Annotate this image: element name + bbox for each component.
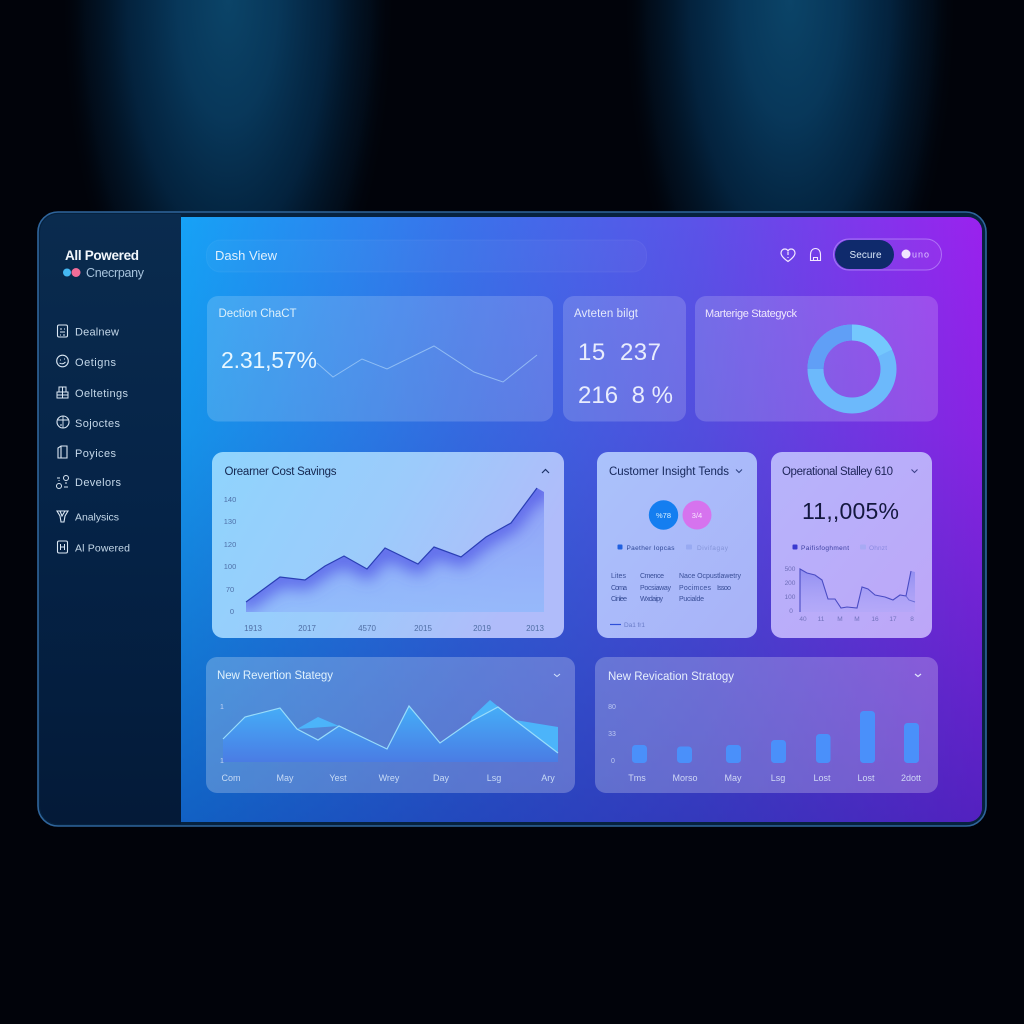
mini legend: [610, 622, 645, 629]
donut chart: [816, 332, 888, 406]
x axis labels: Morso: [672, 773, 698, 783]
brand name: All Powered: [65, 248, 139, 263]
legend: Ohnzt: [869, 545, 887, 552]
data table: Coma: [611, 585, 627, 592]
header search bar: [206, 240, 646, 272]
x axis labels: M: [854, 616, 860, 623]
nav item: Dealnew: Dealnew: [75, 326, 119, 338]
y axis labels: 100: [224, 562, 236, 571]
metric row 2: 216 8 %: [578, 382, 673, 409]
bubble: blue: %78: [656, 511, 671, 520]
nav item: Oeltetings: Oeltetings: [75, 388, 128, 400]
y axis labels: 80: [608, 704, 616, 711]
heading: New Revertion Stategy: [217, 670, 333, 682]
data table: [611, 573, 742, 603]
nav item: Poyices: Poyices: [75, 448, 116, 460]
heading: Marterige Stategyck: [705, 308, 798, 320]
heading: Avteten bilgt: [574, 308, 639, 320]
heading: Dection ChaCT: [218, 308, 296, 320]
nav item: Oetigns: Oetigns: [75, 357, 116, 369]
panel: new revention strategy: [206, 657, 575, 793]
legend: [618, 544, 729, 552]
bubble: pink: 3/4: [692, 511, 702, 520]
x axis labels: Tms: [628, 773, 646, 783]
legend: Paether Iopcas: [626, 545, 675, 552]
data table: Pucialde: [679, 596, 704, 603]
nav item: Develors: [56, 476, 122, 489]
nav item: Poyices: [58, 446, 116, 460]
x axis labels: Lost: [857, 773, 875, 783]
nav item: Analysics: Analysics: [75, 512, 119, 524]
panel: new revication strategy: [595, 657, 938, 793]
x axis labels: 2015: [414, 624, 432, 633]
panel: operational strategy: [771, 452, 932, 638]
nav item: Dealnew: [58, 325, 119, 338]
data table: Nace Ocpustlawetry: [679, 573, 742, 580]
panel: key figures: [563, 296, 686, 422]
chevron: [736, 470, 742, 472]
x axis labels: 4570: [358, 624, 376, 633]
dashboard frame: [38, 212, 986, 826]
panel: customer insight trends: [597, 452, 757, 638]
y axis labels: 130: [224, 517, 236, 526]
x axis labels: 17: [889, 616, 897, 623]
y axis labels: [608, 704, 616, 765]
toggle: secure: Secure: [850, 250, 882, 261]
panel: marketing strategy donut: [695, 296, 938, 422]
data table: Cmence: [640, 573, 664, 580]
metric row 1: 15 237: [578, 339, 661, 366]
y axis labels: 120: [224, 540, 236, 549]
x axis labels: [221, 773, 555, 783]
heading: Operational Stalley 610: [782, 466, 893, 478]
nav item: Oeltetings: [57, 387, 128, 400]
x axis labels: Yest: [329, 773, 347, 783]
y axis labels: [220, 704, 224, 765]
heading: Orearner Cost Savings: [224, 466, 337, 478]
x axis labels: 2019: [473, 624, 491, 633]
legend: Paifisfoghment: [801, 545, 849, 552]
sidebar: [40, 214, 181, 824]
y axis labels: 100: [785, 594, 796, 601]
x axis labels: 11: [818, 616, 825, 623]
x axis labels: Day: [433, 773, 449, 783]
data table: Wxdaipy: [640, 596, 664, 603]
y axis labels: 0: [230, 607, 234, 616]
toggle: secure: [834, 239, 942, 270]
data table: Pocsiaway: [640, 585, 672, 592]
heading: New Revication Stratogy: [608, 671, 734, 683]
y axis labels: 500: [785, 566, 796, 573]
x axis labels: 16: [871, 616, 879, 623]
panel: decision chart: [207, 296, 553, 422]
x axis labels: 2013: [526, 624, 544, 633]
y axis labels: 1: [220, 704, 224, 711]
y axis labels: 33: [608, 731, 616, 738]
chevron: [915, 674, 921, 676]
chevron: [542, 470, 549, 473]
header search bar: Dash View: [215, 248, 278, 263]
toggle: secure: uno: [912, 250, 929, 260]
x axis labels: 2dott: [901, 773, 922, 783]
chevron: [912, 470, 918, 472]
x axis labels: 40: [799, 616, 807, 623]
data table: Issoo: [717, 585, 731, 592]
y axis labels: 0: [789, 608, 793, 615]
nav item: Develors: Develors: [75, 477, 122, 489]
legend: [792, 544, 887, 552]
main content area: [181, 217, 982, 822]
mini legend: Da1 fr1: [624, 622, 645, 629]
x axis labels: Wrey: [379, 773, 400, 783]
x axis labels: May: [724, 773, 742, 783]
metric: 11,,005%: [802, 498, 899, 524]
x axis labels: [628, 773, 922, 783]
x axis labels: Ary: [541, 773, 555, 783]
nav item: AI Powered: Al Powered: [75, 542, 130, 554]
y axis labels: 0: [611, 758, 615, 765]
bubble: blue: [649, 500, 678, 530]
y axis labels: 70: [226, 585, 234, 594]
metric: 2.31,57%: [221, 347, 317, 373]
line chart: [800, 569, 915, 612]
heading: Customer Insight Tends: [609, 466, 729, 478]
x axis labels: 1913: [244, 624, 262, 633]
data table: Lites: [611, 573, 626, 580]
bar chart: [632, 711, 919, 763]
panel: customer cost savings: [212, 452, 564, 638]
area chart: [223, 700, 558, 762]
x axis labels: 2017: [298, 624, 316, 633]
x axis labels: Lsg: [771, 773, 785, 783]
bubble: pink: [682, 500, 712, 530]
data table: Cinlee: [611, 596, 627, 603]
icon: heart: [781, 249, 795, 262]
y axis labels: 140: [224, 495, 236, 504]
area chart: [240, 488, 550, 612]
brand company: Cnecrpany: [86, 266, 145, 280]
nav item: Sojoctes: Sojoctes: [75, 418, 120, 430]
x axis labels: M: [837, 616, 843, 623]
nav item: Oetigns: [57, 355, 116, 369]
x axis labels: [799, 616, 914, 623]
legend: Divifagay: [697, 545, 729, 552]
sparkline: [317, 346, 537, 382]
y axis labels: [224, 495, 236, 616]
x axis labels: May: [276, 773, 294, 783]
x axis labels: [244, 624, 544, 633]
y axis labels: 1: [220, 758, 224, 765]
x axis labels: Lsg: [487, 773, 501, 783]
x axis labels: 8: [910, 616, 914, 623]
nav item: Sojoctes: [57, 416, 120, 430]
x axis labels: Lost: [813, 773, 831, 783]
y axis labels: 200: [785, 580, 796, 587]
icon: bell: [810, 248, 820, 260]
y axis labels: [785, 566, 796, 615]
nav item: AI Powered: [58, 541, 130, 554]
nav item: Analysics: [57, 511, 119, 524]
chevron: [554, 674, 560, 676]
x axis labels: Com: [221, 773, 241, 783]
data table: Pocimces: [679, 585, 712, 592]
